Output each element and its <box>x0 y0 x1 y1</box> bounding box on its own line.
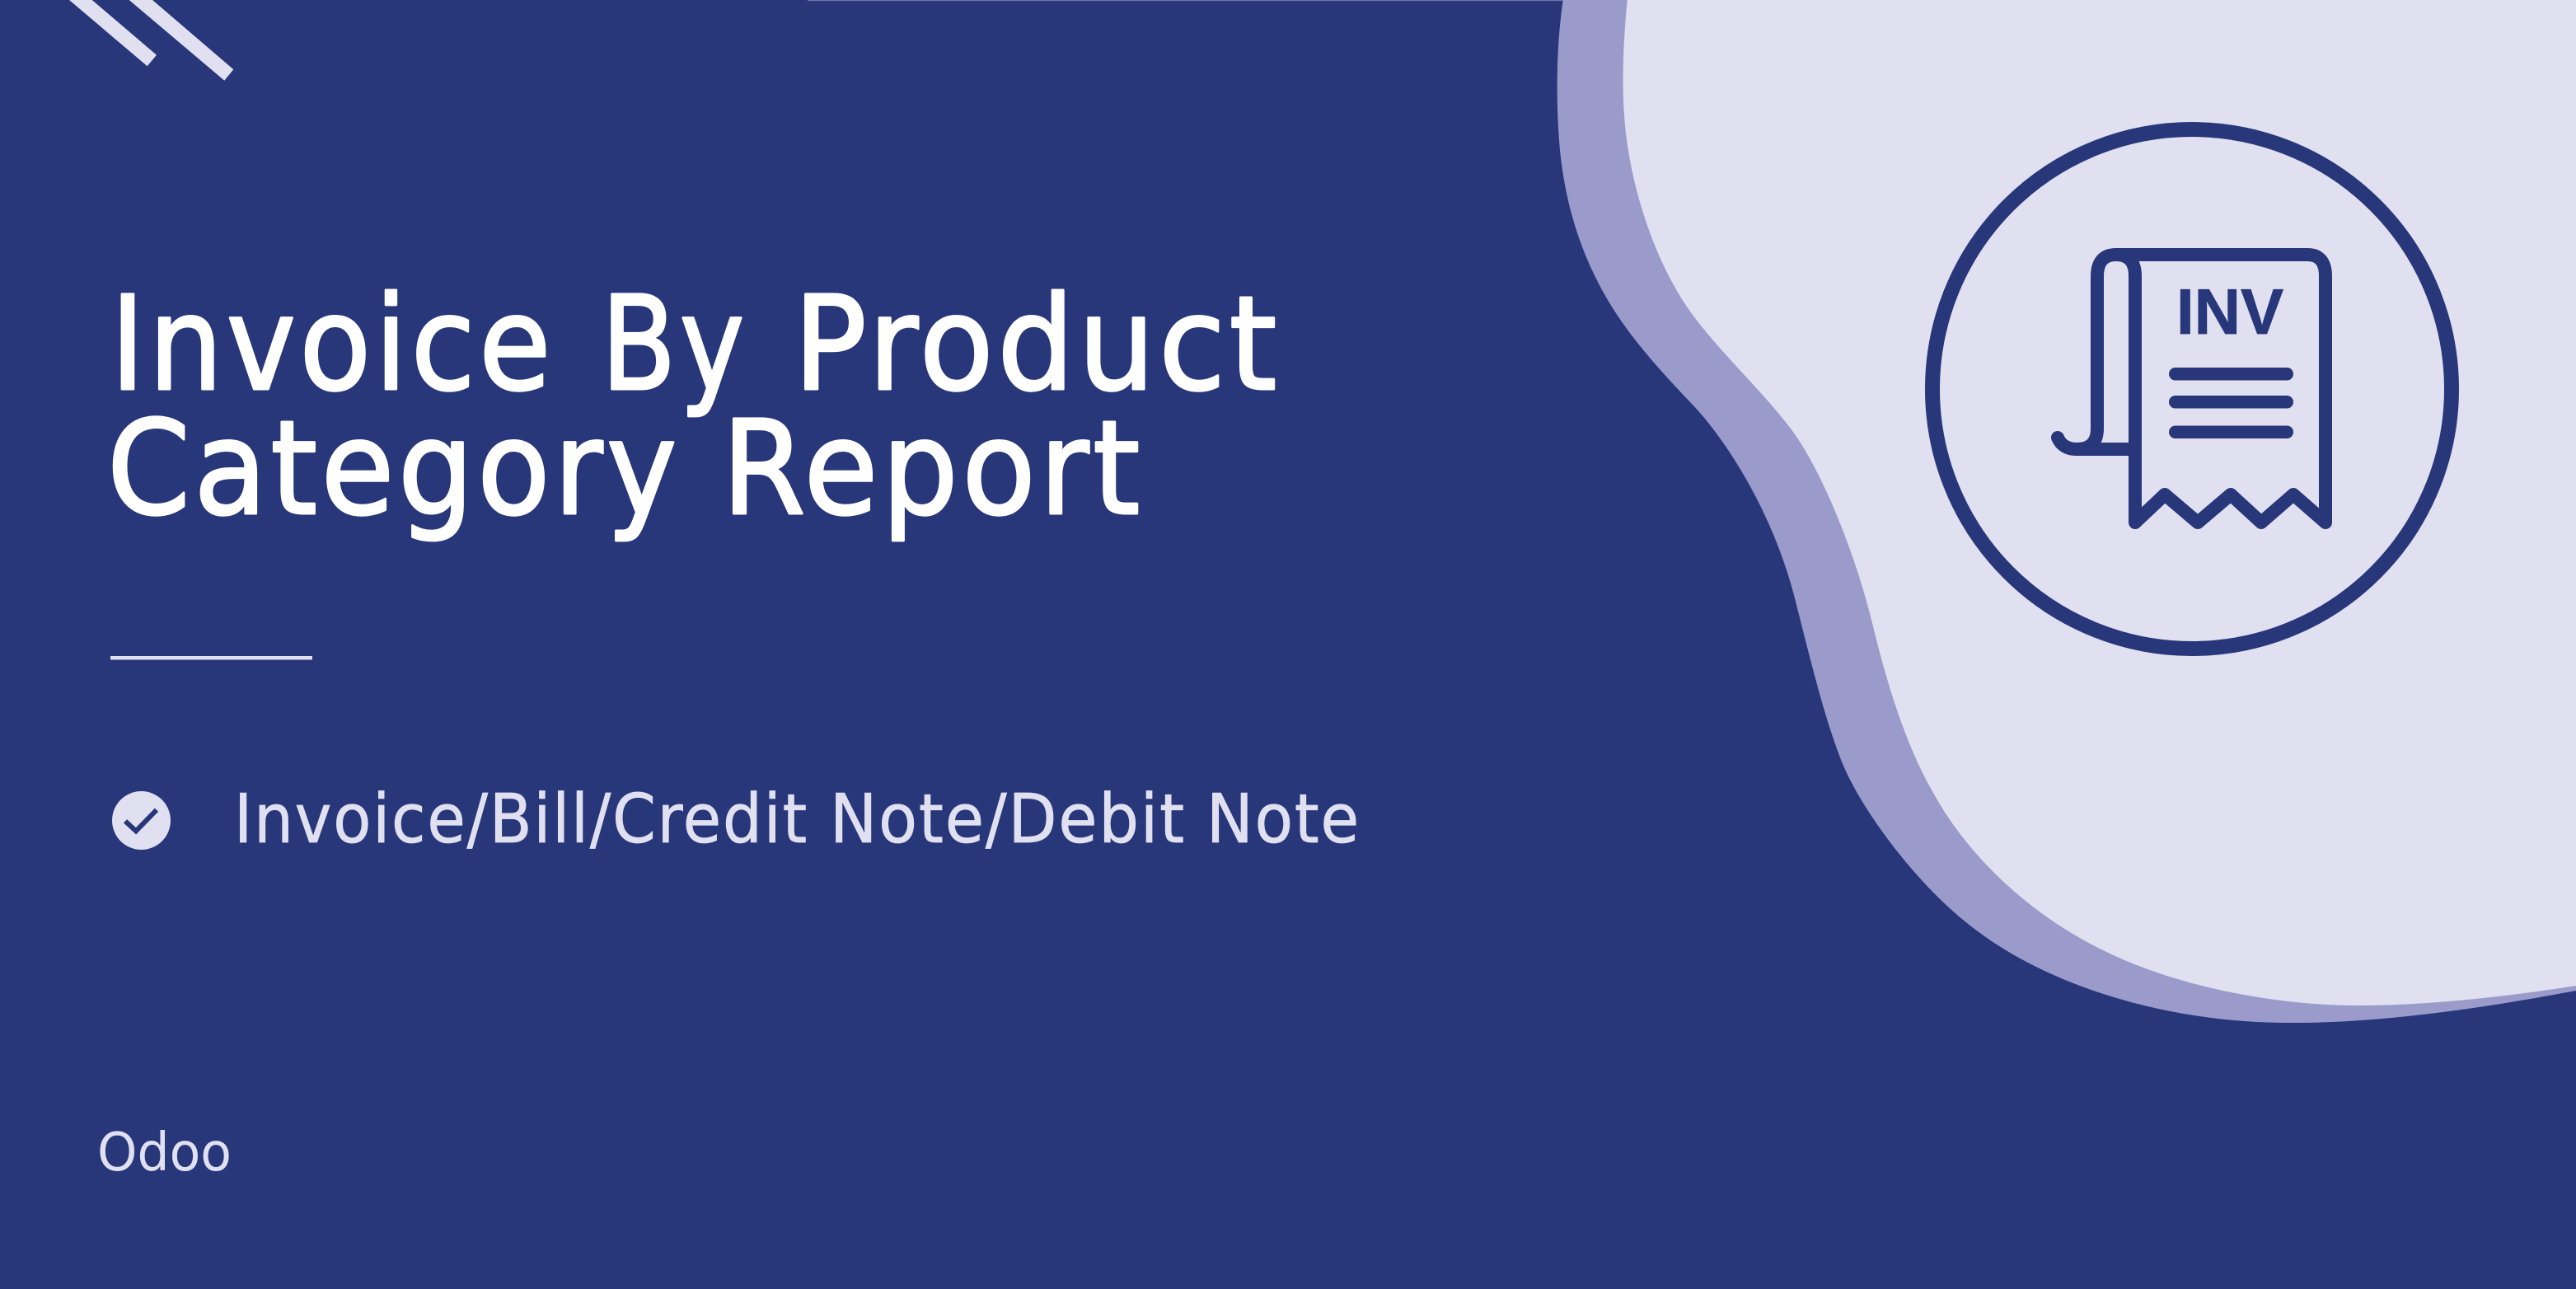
feature item: document types <box>112 780 1361 859</box>
title: Category <box>107 393 681 545</box>
text lines <box>2169 368 2293 438</box>
divider <box>110 656 312 659</box>
icon: check badge <box>112 791 171 850</box>
platform label: Odoo <box>97 1123 232 1184</box>
feature text: Invoice/Bill/Credit <box>234 780 808 859</box>
circle ring <box>1932 129 2452 649</box>
title: Report <box>722 393 1144 545</box>
INV label: INV <box>2176 275 2283 348</box>
title: Product <box>794 269 1281 420</box>
decorative corner stripes <box>69 0 233 81</box>
feature text: Note <box>1206 780 1361 859</box>
icon: invoice in circle <box>1932 129 2452 649</box>
feature text <box>234 780 1361 859</box>
feature text: Note/Debit <box>830 780 1186 859</box>
mid lavender blob <box>1557 0 2576 1023</box>
invoice scroll outline <box>2058 255 2325 523</box>
title: By <box>602 269 748 420</box>
title: Invoice <box>110 269 555 420</box>
light lavender blob <box>1623 0 2576 1005</box>
title <box>107 269 1281 545</box>
